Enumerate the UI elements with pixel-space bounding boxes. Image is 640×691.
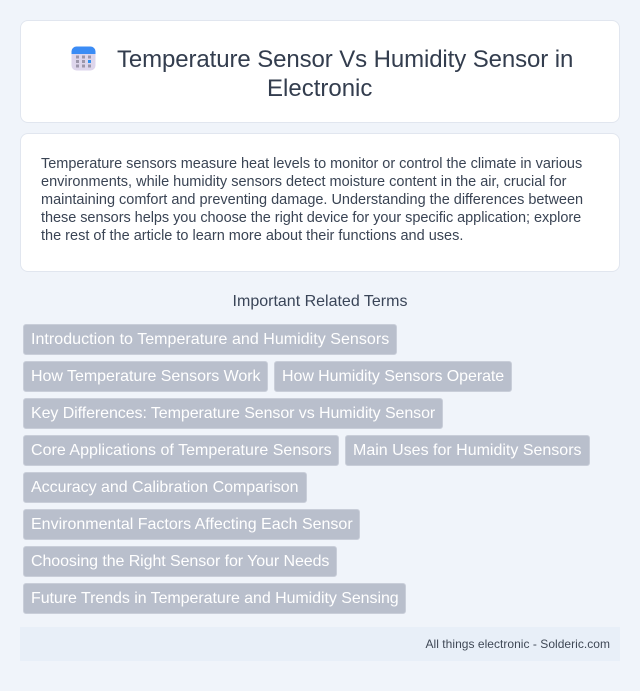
tag: Environmental Factors Affecting Each Sensor [31, 516, 353, 533]
footer [20, 627, 620, 661]
tag: Key Differences: Temperature Sensor vs Humidity Sensor [31, 405, 435, 422]
tag [23, 435, 339, 466]
tag: Introduction to Temperature and Humidity Sensors [31, 331, 389, 348]
title: Temperature Sensor Vs Humidity Sensor in [117, 46, 573, 73]
text block: introduction: maintaining comfort and preventing damage. Understanding the differences between [41, 192, 583, 208]
panel: related term tags [23, 324, 590, 614]
tag: Future Trends in Temperature and Humidity Sensing [31, 590, 399, 607]
tag [274, 361, 512, 392]
text block: introduction: the rest of the article to learn more about their functions and uses. [41, 228, 463, 244]
panel: introduction text [20, 133, 620, 272]
title: Electronic [267, 75, 372, 102]
tag [345, 435, 590, 466]
text block: introduction: environments, while humidity sensors detect moisture content in the air, crucial for [41, 174, 566, 190]
tag [23, 398, 443, 429]
panel: title header [20, 20, 620, 123]
tag [23, 361, 268, 392]
text block: introduction: these sensors helps you choose the right device for your specific application; explore [41, 210, 581, 226]
tag: How Humidity Sensors Operate [282, 368, 504, 385]
heading: important related terms: Important Related Terms [233, 293, 407, 310]
title [117, 46, 573, 102]
text block: introduction [41, 156, 583, 244]
tag: Accuracy and Calibration Comparison [31, 479, 299, 496]
tag [23, 546, 337, 577]
icon: calendar grid [72, 46, 96, 70]
tag: Core Applications of Temperature Sensors [31, 442, 332, 459]
tag: Main Uses for Humidity Sensors [353, 442, 582, 459]
tag [23, 509, 360, 540]
text block: introduction: Temperature sensors measure heat levels to monitor or control the climate in various [41, 156, 582, 172]
tag [23, 324, 397, 355]
tag: How Temperature Sensors Work [31, 368, 260, 385]
tag [23, 472, 307, 503]
tag: Choosing the Right Sensor for Your Needs [31, 553, 329, 570]
tag [23, 583, 406, 614]
footer text: All things electronic - Solderic.com [426, 637, 610, 651]
